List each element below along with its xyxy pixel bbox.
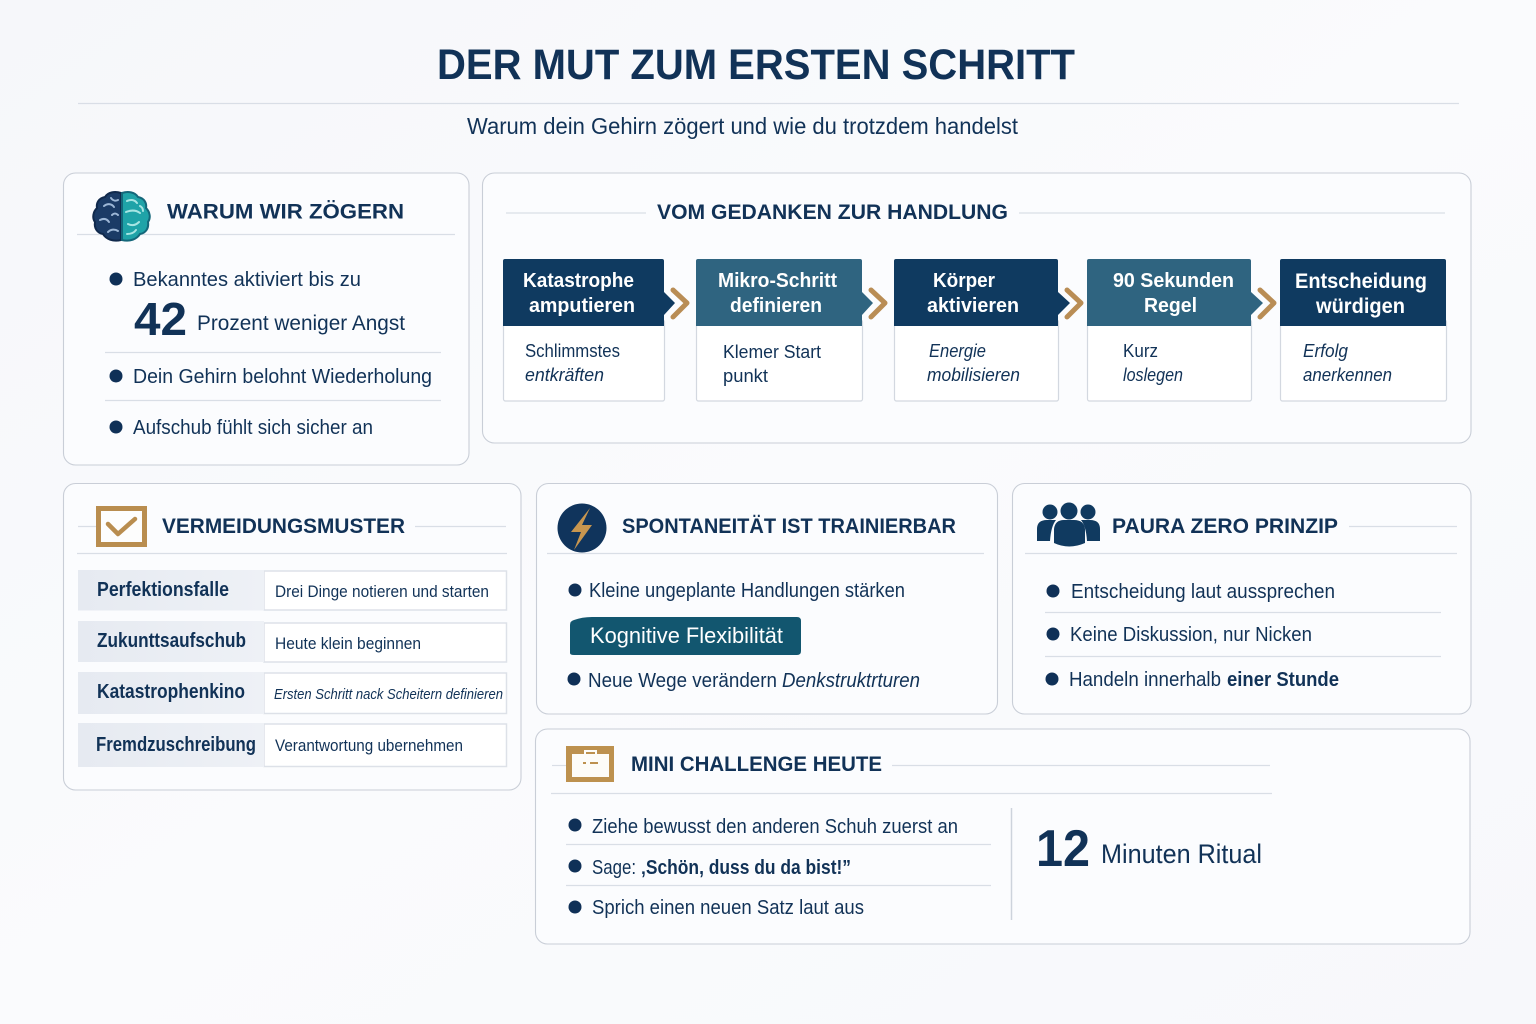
panel: vermeidungsmuster (64, 484, 521, 790)
bullet: handlungen: Kleine ungeplante Handlungen stärken (589, 580, 905, 602)
step 3: Körper (933, 270, 995, 292)
step 1: entkräften (525, 365, 604, 385)
bullet: aufschub: Aufschub fühlt sich sicher an (133, 416, 373, 439)
bullet: satz: Sprich einen neuen Satz laut aus (592, 897, 864, 919)
title: DER MUT ZUM ERSTEN SCHRITT (437, 41, 1075, 89)
step 4: Kurz (1123, 341, 1158, 361)
stat: 12 minuten ritual (1036, 820, 1262, 878)
step 5 (1280, 259, 1446, 401)
step 1: Schlimmstes (525, 341, 620, 361)
bullet: sage (568, 857, 851, 879)
step 4: Regel (1144, 295, 1197, 317)
step 2: definieren (730, 295, 822, 317)
row: perfektionsfalle: Drei Dinge notieren und starten (275, 583, 489, 601)
arrow 2 (871, 290, 885, 317)
row: fremdzuschreibung: Fremdzuschreibung (96, 734, 256, 756)
bullet: handeln: einer Stunde (1227, 669, 1339, 691)
row: fremdzuschreibung (78, 723, 506, 767)
bullet: neue wege: Neue Wege verändern (588, 670, 777, 692)
stat: 12 minuten ritual: Minuten Ritual (1101, 839, 1262, 869)
heading: VOM GEDANKEN ZUR HANDLUNG (657, 200, 1008, 224)
icon: checkbox (98, 508, 144, 544)
arrow 3 (1067, 290, 1081, 317)
panel: mini challenge heute (536, 729, 1470, 944)
row: zukunftsaufschub (78, 621, 506, 662)
step 1: amputieren (529, 295, 635, 317)
step 5: Erfolg (1303, 341, 1348, 361)
bullet: wiederholung: Dein Gehirn belohnt Wiederholung (133, 365, 432, 388)
row: perfektionsfalle (78, 570, 506, 610)
bullet: sage: Sage: (592, 857, 636, 879)
step 1: Katastrophe (523, 270, 634, 292)
icon: brain (93, 192, 150, 241)
step 4: 90 Sekunden (1113, 270, 1234, 292)
heading: MINI CHALLENGE HEUTE (631, 752, 882, 776)
bullet: handeln: Handeln innerhalb (1069, 669, 1221, 691)
row: katastrophenkino: Katastrophenkino (97, 681, 245, 703)
step 3 (894, 259, 1070, 401)
step 2: Klemer Start (723, 342, 821, 362)
panel: vom gedanken zur handlung (482, 173, 1471, 443)
row: fremdzuschreibung: Verantwortung ubernehmen (275, 737, 463, 755)
pill: kognitive flexibilität: Kognitive Flexibilität (590, 623, 783, 648)
bullet: schuh: Ziehe bewusst den anderen Schuh zuerst an (592, 816, 958, 838)
step 4: loslegen (1123, 365, 1183, 385)
subtitle: Warum dein Gehirn zögert und wie du trotzdem handelst (467, 113, 1019, 139)
heading: PAURA ZERO PRINZIP (1112, 514, 1338, 538)
row: perfektionsfalle: Perfektionsfalle (97, 579, 229, 601)
step 3: mobilisieren (927, 365, 1020, 385)
step 5: anerkennen (1303, 365, 1392, 385)
bullet: handeln (1046, 669, 1339, 691)
stat: 42 prozent: 42 (134, 293, 187, 345)
icon: briefcase (566, 746, 614, 782)
panel: spontaneität (536, 484, 998, 714)
row: zukunftsaufschub: Heute klein beginnen (275, 635, 421, 653)
step 2 (696, 259, 873, 401)
panel: paura zero prinzip (1012, 484, 1471, 714)
heading: VERMEIDUNGSMUSTER (162, 514, 405, 538)
step 5: Entscheidung (1295, 270, 1427, 293)
row: katastrophenkino: Ersten Schritt nack Scheitern definieren (274, 686, 503, 703)
panel: warum wir zögern (64, 173, 469, 465)
step 1 (503, 259, 675, 401)
icon: people (1037, 502, 1100, 546)
bullet: neue wege: Denkstruktrturen (782, 670, 920, 692)
row: zukunftsaufschub: Zukunttsaufschub (97, 630, 246, 652)
bullet: neue wege (568, 670, 920, 692)
step 2: Mikro-Schritt (718, 270, 837, 292)
step 3: aktivieren (927, 295, 1019, 317)
arrow 1 (673, 290, 687, 317)
step 5: würdigen (1315, 295, 1405, 318)
bullet: nicken: Keine Diskussion, nur Nicken (1070, 624, 1312, 646)
bullet: sage: ‚Schön, duss du da bist!” (641, 857, 851, 879)
step 2: punkt (723, 366, 768, 386)
step 4 (1087, 259, 1263, 401)
heading: SPONTANEITÄT IST TRAINIERBAR (622, 514, 956, 538)
icon: lightning (558, 504, 606, 552)
step 3: Energie (929, 341, 986, 361)
stat: 42 prozent: Prozent weniger Angst (197, 311, 405, 335)
row: katastrophenkino (78, 672, 506, 714)
arrow 4 (1260, 290, 1274, 317)
bullet: bekanntes: Bekanntes aktiviert bis zu (133, 268, 361, 291)
pill: kognitive flexibilität (570, 617, 801, 655)
stat: 12 minuten ritual: 12 (1036, 820, 1090, 878)
bullet: aussprechen: Entscheidung laut aussprechen (1071, 581, 1335, 603)
heading: WARUM WIR ZÖGERN (167, 198, 404, 224)
stat: 42 prozent (134, 293, 405, 345)
